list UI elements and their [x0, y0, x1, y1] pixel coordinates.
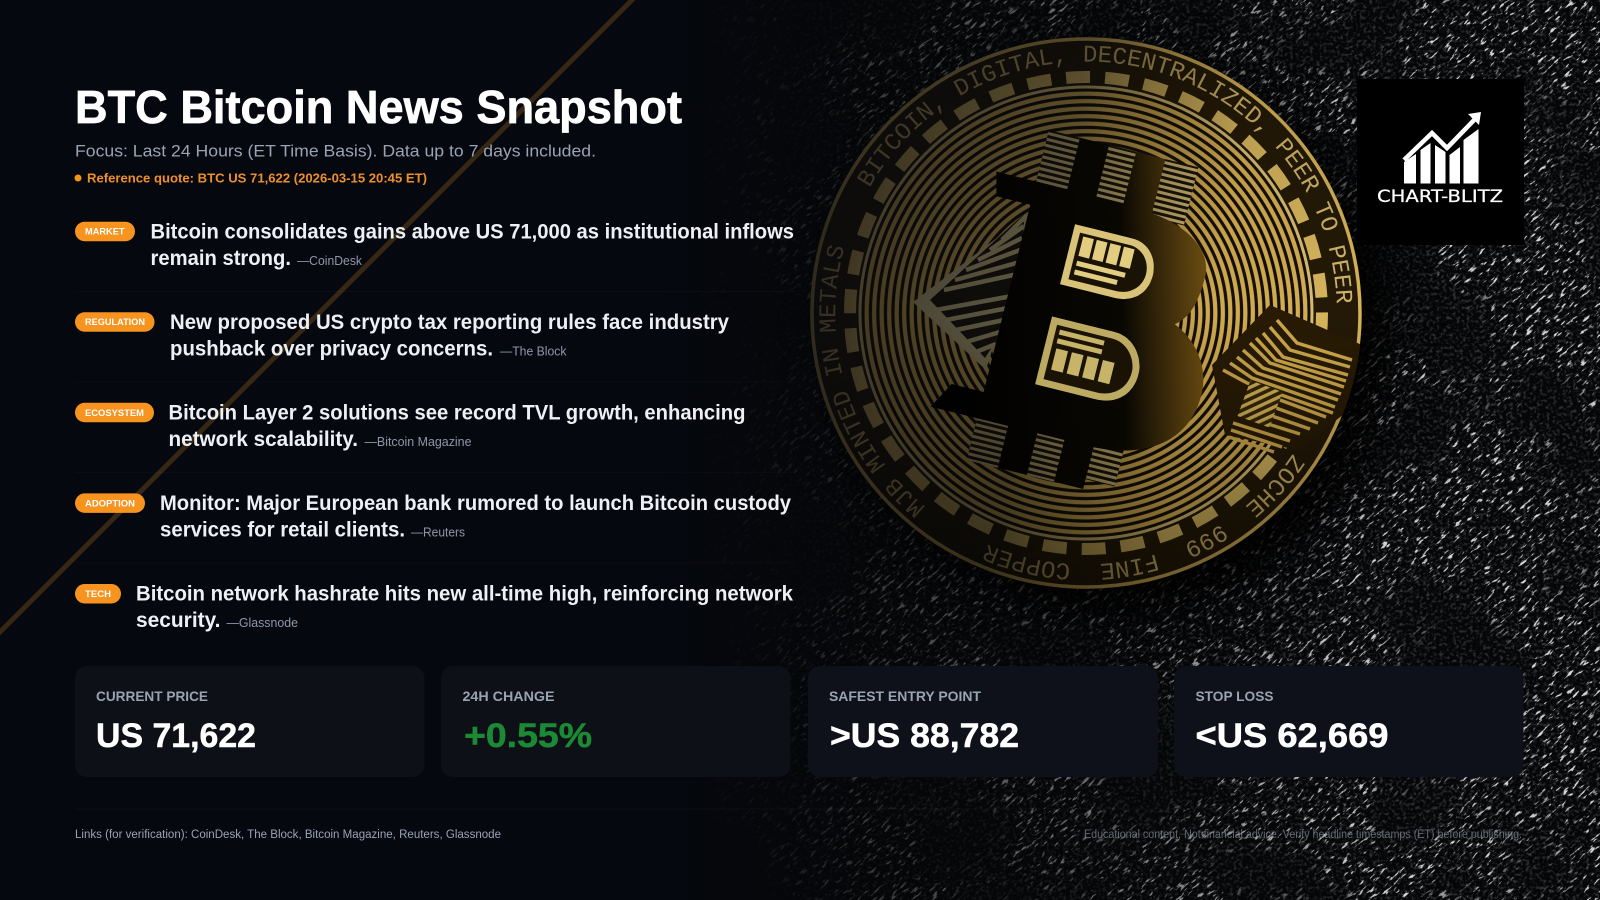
headline: adoption — [160, 492, 791, 542]
title: BTC Bitcoin News Snapshot — [75, 81, 682, 133]
headline: regulation: New proposed US crypto tax reporting rules face industry — [170, 311, 729, 334]
headline: ecosystem: —Bitcoin Magazine — [364, 435, 472, 449]
stat card: 24h change: +0.55% — [464, 717, 592, 755]
subtitle: Focus: Last 24 Hours (ET Time Basis). Data up to 7 days included. — [75, 142, 596, 160]
stat card: stop loss: <US 62,669 — [1196, 717, 1388, 755]
coin lettering — [835, 62, 1337, 564]
left dark panel overlay — [0, 0, 860, 900]
headline: regulation: —The Block — [500, 344, 567, 358]
tag: tech — [75, 584, 121, 604]
headline: ecosystem — [168, 402, 746, 451]
tag: market: MARKET — [85, 227, 125, 238]
news item: market — [75, 220, 794, 270]
stat card: 24h change — [441, 666, 790, 777]
chip block — [1238, 380, 1282, 428]
news item: ecosystem — [75, 402, 746, 451]
symbol hatching — [967, 130, 1198, 497]
bitcoin symbol — [930, 138, 1206, 489]
news item: adoption — [75, 492, 791, 542]
stat card: current price: CURRENT PRICE — [96, 688, 208, 704]
tag: market — [75, 222, 135, 241]
headline: tech — [136, 582, 793, 632]
stone texture — [740, 0, 1600, 900]
headline: adoption: services for retail clients. — [160, 518, 405, 542]
tag: tech: TECH — [85, 589, 111, 600]
headline: tech: Bitcoin network hashrate hits new all-time high, reinforcing network — [136, 582, 793, 606]
diagonal accent line — [0, 0, 636, 636]
icon: rising bars and arrow — [1404, 112, 1481, 184]
headline: market — [150, 220, 794, 270]
tag: regulation: REGULATION — [85, 317, 145, 328]
headline: market: remain strong. — [150, 247, 291, 270]
reference quote: Reference quote: BTC US 71,622 (2026-03-15 20:45 ET) — [87, 170, 427, 186]
symbol details — [1035, 224, 1154, 400]
coin shadow — [830, 53, 1394, 617]
headline: adoption: Monitor: Major European bank rumored to launch Bitcoin custody — [160, 492, 791, 515]
logo: chart-blitz — [1357, 79, 1524, 245]
stat card: 24h change: 24H CHANGE — [462, 688, 554, 704]
headline: market: Bitcoin consolidates gains above US 71,000 as institutional inflows — [150, 220, 794, 244]
headline: tech: security. — [136, 609, 220, 632]
stat card: stop loss: STOP LOSS — [1196, 688, 1274, 704]
logo wordmark: CHART-BLITZ — [1377, 187, 1503, 207]
stat card: safest entry point: SAFEST ENTRY POINT — [829, 688, 981, 704]
stat card: stop loss — [1174, 666, 1524, 777]
tag: adoption: ADOPTION — [85, 498, 135, 509]
tag: regulation — [75, 312, 154, 332]
headline: regulation: pushback over privacy concerns. — [170, 338, 493, 360]
bitcoin coin: BITCOIN, DIGITAL, DECENTRALIZED, PEER TO PEER ZOCHE 999 FINE COPPER MJB MINTED IN METALS — [819, 46, 1352, 580]
circuit traces right — [1212, 305, 1362, 450]
headline: adoption: —Reuters — [411, 526, 465, 540]
stat card: safest entry point: >US 88,782 — [830, 717, 1019, 755]
stat card: current price — [75, 666, 424, 777]
stat card: current price: US 71,622 — [96, 717, 256, 755]
news item: regulation — [75, 311, 729, 360]
coin lighting — [809, 36, 1363, 590]
footer links: Links (for verification): CoinDesk, The Block, Bitcoin Magazine, Reuters, Glassnode — [75, 829, 501, 841]
headline: ecosystem: Bitcoin Layer 2 solutions see record TVL growth, enhancing — [168, 402, 746, 424]
news item: tech — [75, 582, 793, 632]
left circuit triangle — [914, 214, 1028, 370]
stat card: safest entry point — [808, 666, 1158, 777]
tag: ecosystem — [75, 403, 154, 422]
dashed rim — [850, 77, 1322, 549]
headline: tech: —Glassnode — [226, 616, 298, 630]
footer disclaimer: Educational content. Not financial advice. Verify headline timestamps (ET) before publishing. — [1084, 829, 1522, 841]
tag: ecosystem: ECOSYSTEM — [85, 408, 144, 419]
headline: ecosystem: network scalability. — [168, 428, 358, 451]
tag: adoption — [75, 493, 145, 513]
headline: market: —CoinDesk — [297, 254, 363, 268]
headline: regulation — [170, 311, 729, 360]
